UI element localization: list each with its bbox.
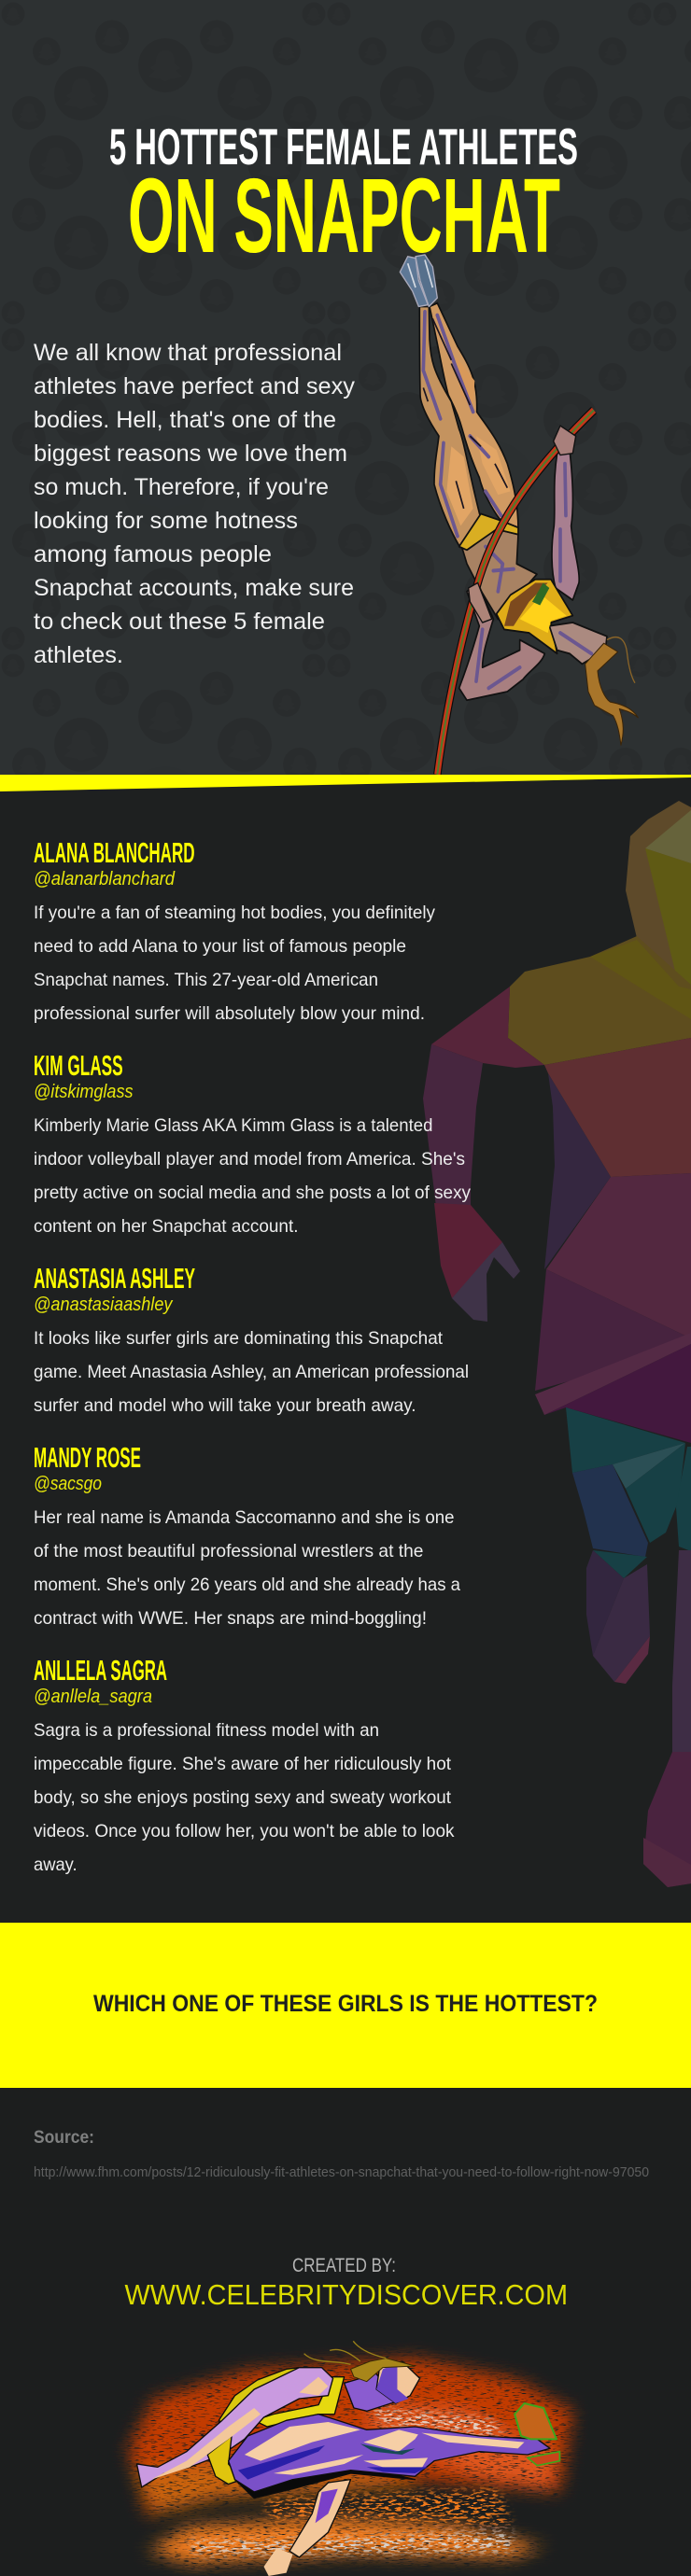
athlete: Kim Glass: pretty active on social media and she posts a lot of sexy — [34, 1183, 471, 1203]
low-poly runner silhouette — [423, 801, 691, 1887]
athlete: Anllela Sagra — [34, 1654, 455, 1875]
athlete: Anastasia Ashley: game. Meet Anastasia Ashley, an American professional — [34, 1362, 469, 1382]
athlete: Kim Glass: @itskimglass — [34, 1082, 133, 1102]
athlete: Anllela Sagra: videos. Once you follow her, you won't be able to look — [34, 1821, 455, 1841]
illustration: pole vaulter — [400, 255, 638, 775]
athlete: Anastasia Ashley — [34, 1262, 469, 1416]
created by credit: CREATED BY: — [292, 2255, 396, 2276]
athlete: Mandy Rose: @sacsgo — [34, 1474, 102, 1494]
created by credit: WWW.CELEBRITYDISCOVER.COM — [125, 2278, 568, 2311]
athlete: Alana Blanchard: ALANA BLANCHARD — [34, 836, 195, 869]
athlete: Alana Blanchard: Snapchat names. This 27-year-old American — [34, 970, 378, 990]
source: Source: — [34, 2128, 94, 2148]
athlete: Anllela Sagra: ANLLELA SAGRA — [34, 1654, 167, 1687]
athlete: Anastasia Ashley: ANASTASIA ASHLEY — [34, 1262, 195, 1295]
intro text block: Snapchat accounts, make sure — [34, 575, 354, 601]
athlete: Anllela Sagra: away. — [34, 1855, 78, 1875]
athlete: Anastasia Ashley: @anastasiaashley — [34, 1295, 173, 1315]
athlete: Kim Glass: indoor volleyball player and model from America. She's — [34, 1149, 465, 1169]
athlete: Alana Blanchard: If you're a fan of steaming hot bodies, you definitely — [34, 903, 435, 923]
created by credit — [125, 2255, 568, 2311]
intro text block: so much. Therefore, if you're — [34, 474, 329, 500]
athlete: Kim Glass: content on her Snapchat account. — [34, 1216, 299, 1237]
intro text block — [34, 340, 355, 668]
athlete: Kim Glass — [34, 1049, 471, 1237]
intro text block: bodies. Hell, that's one of the — [34, 407, 336, 433]
athlete: Mandy Rose — [34, 1441, 460, 1629]
illustration: hurdler on orange brush strokes — [129, 2341, 572, 2576]
source: http://www.fhm.com/posts/12-ridiculously-fit-athletes-on-snapchat-that-you-need-to-follow-right-now-97050 — [34, 2164, 649, 2180]
intro text block: to check out these 5 female — [34, 609, 325, 635]
athlete: Mandy Rose: contract with WWE. Her snaps are mind-boggling! — [34, 1608, 427, 1629]
athlete: Alana Blanchard: professional surfer will absolutely blow your mind. — [34, 1003, 425, 1024]
athlete: Kim Glass: KIM GLASS — [34, 1049, 123, 1082]
panel: yellow question banner — [0, 1923, 691, 2088]
athlete: Alana Blanchard — [34, 836, 435, 1024]
athlete: Anastasia Ashley: surfer and model who will take your breath away. — [34, 1395, 416, 1416]
intro text block: biggest reasons we love them — [34, 441, 347, 467]
athlete: Mandy Rose: moment. She's only 26 years old and she already has a — [34, 1575, 460, 1595]
athlete: Kim Glass: Kimberly Marie Glass AKA Kimm Glass is a talented — [34, 1115, 432, 1136]
athlete: Anllela Sagra: Sagra is a professional fitness model with an — [34, 1720, 379, 1741]
athlete: Anllela Sagra: @anllela_sagra — [34, 1687, 152, 1707]
athlete: Alana Blanchard: need to add Alana to your list of famous people — [34, 936, 406, 957]
athlete: Alana Blanchard: @alanarblanchard — [34, 869, 176, 889]
athlete: Anllela Sagra: impeccable figure. She's aware of her ridiculously hot — [34, 1754, 452, 1774]
intro text block: among famous people — [34, 541, 272, 567]
intro text block: looking for some hotness — [34, 508, 298, 534]
intro text block: athletes have perfect and sexy — [34, 373, 355, 399]
source — [34, 2128, 649, 2180]
panel: yellow question banner: WHICH ONE OF THESE GIRLS IS THE HOTTEST? — [93, 1991, 598, 2017]
athlete: Anllela Sagra: body, so she enjoys posting sexy and sweaty workout — [34, 1787, 452, 1808]
athlete: Mandy Rose: of the most beautiful professional wrestlers at the — [34, 1541, 424, 1561]
title — [109, 118, 578, 274]
intro text block: athletes. — [34, 642, 123, 668]
panel: footer background — [0, 2088, 691, 2576]
panel: dark athlete list section — [0, 776, 691, 2576]
intro text block: We all know that professional — [34, 340, 342, 366]
panel: hero background with snapchat icon pattern — [0, 0, 691, 793]
yellow diagonal band — [0, 775, 691, 791]
athlete: Mandy Rose: Her real name is Amanda Saccomanno and she is one — [34, 1507, 454, 1528]
athlete: Anastasia Ashley: It looks like surfer girls are dominating this Snapchat — [34, 1328, 444, 1349]
athlete: Mandy Rose: MANDY ROSE — [34, 1441, 141, 1474]
